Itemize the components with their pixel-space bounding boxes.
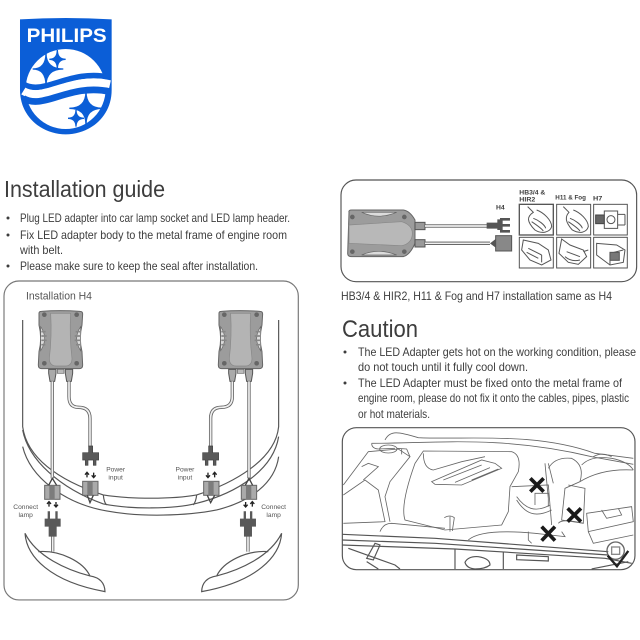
bulb type labels: HIR2 [519,197,536,203]
lamp plugs [45,511,256,537]
warning cross: right [568,508,581,522]
H4 label: H4 [496,206,505,212]
bulb type labels: HB3/4 & [519,191,546,197]
installation steps list: with belt. [19,243,63,257]
engine bay line drawing [343,433,633,543]
panel: bulb type comparison [341,180,637,282]
installation steps list: Plug LED adapter into car lamp socket and LED lamp header. [20,211,290,225]
Philips shield logo [20,18,112,134]
bulb type labels [519,191,603,203]
Philips shield logo: PHILIPS [27,26,107,47]
diagram labels: Connect [261,504,286,511]
warning cross: bottom [542,527,555,541]
bulb type connector grid [519,204,627,268]
hood and firewall lines [342,534,632,569]
diagram labels: input [178,474,192,481]
power plugs and sockets [45,446,257,503]
left and right headlamps [25,533,282,592]
warning cross: top [530,478,544,492]
diagram labels: Power [176,466,195,473]
right LED adapter [218,311,263,381]
caution list: do not touch until it fully cool down. [358,360,528,374]
diagram labels: Connect [13,504,38,511]
bulb type labels: H11 & Fog [555,196,586,202]
H4 connectors [487,218,512,251]
diagram labels: Power [106,466,126,473]
connection arrows [47,472,254,507]
heading: Caution: Caution [342,316,418,343]
diagram labels: lamp [18,512,33,519]
panel title: Installation H4 [26,290,92,302]
left LED adapter [38,311,83,381]
caption: same installation: HB3/4 & HIR2, H11 & Fog and H7 installation same as H4 [341,289,612,303]
correct location check mark [607,542,628,566]
heading: Installation guide: Installation guide [4,176,165,202]
diagram labels: lamp [266,512,281,519]
bulb type labels: H7 [593,196,603,202]
panel: engine bay mounting locations [342,428,635,570]
diagram labels: input [108,474,123,481]
caution list [344,345,636,421]
adapter body, horizontal [348,210,425,257]
adapter cables [425,226,490,243]
diagram labels [13,466,286,519]
bumper outline [23,320,279,515]
cables [52,381,249,552]
installation steps list: Fix LED adapter body to the metal frame of engine room [20,228,287,242]
installation steps list: Please make sure to keep the seal after installation. [20,259,258,273]
caution list: or hot materials. [358,407,430,421]
installation steps list [6,211,290,273]
panel: Installation H4 diagram [4,281,298,600]
